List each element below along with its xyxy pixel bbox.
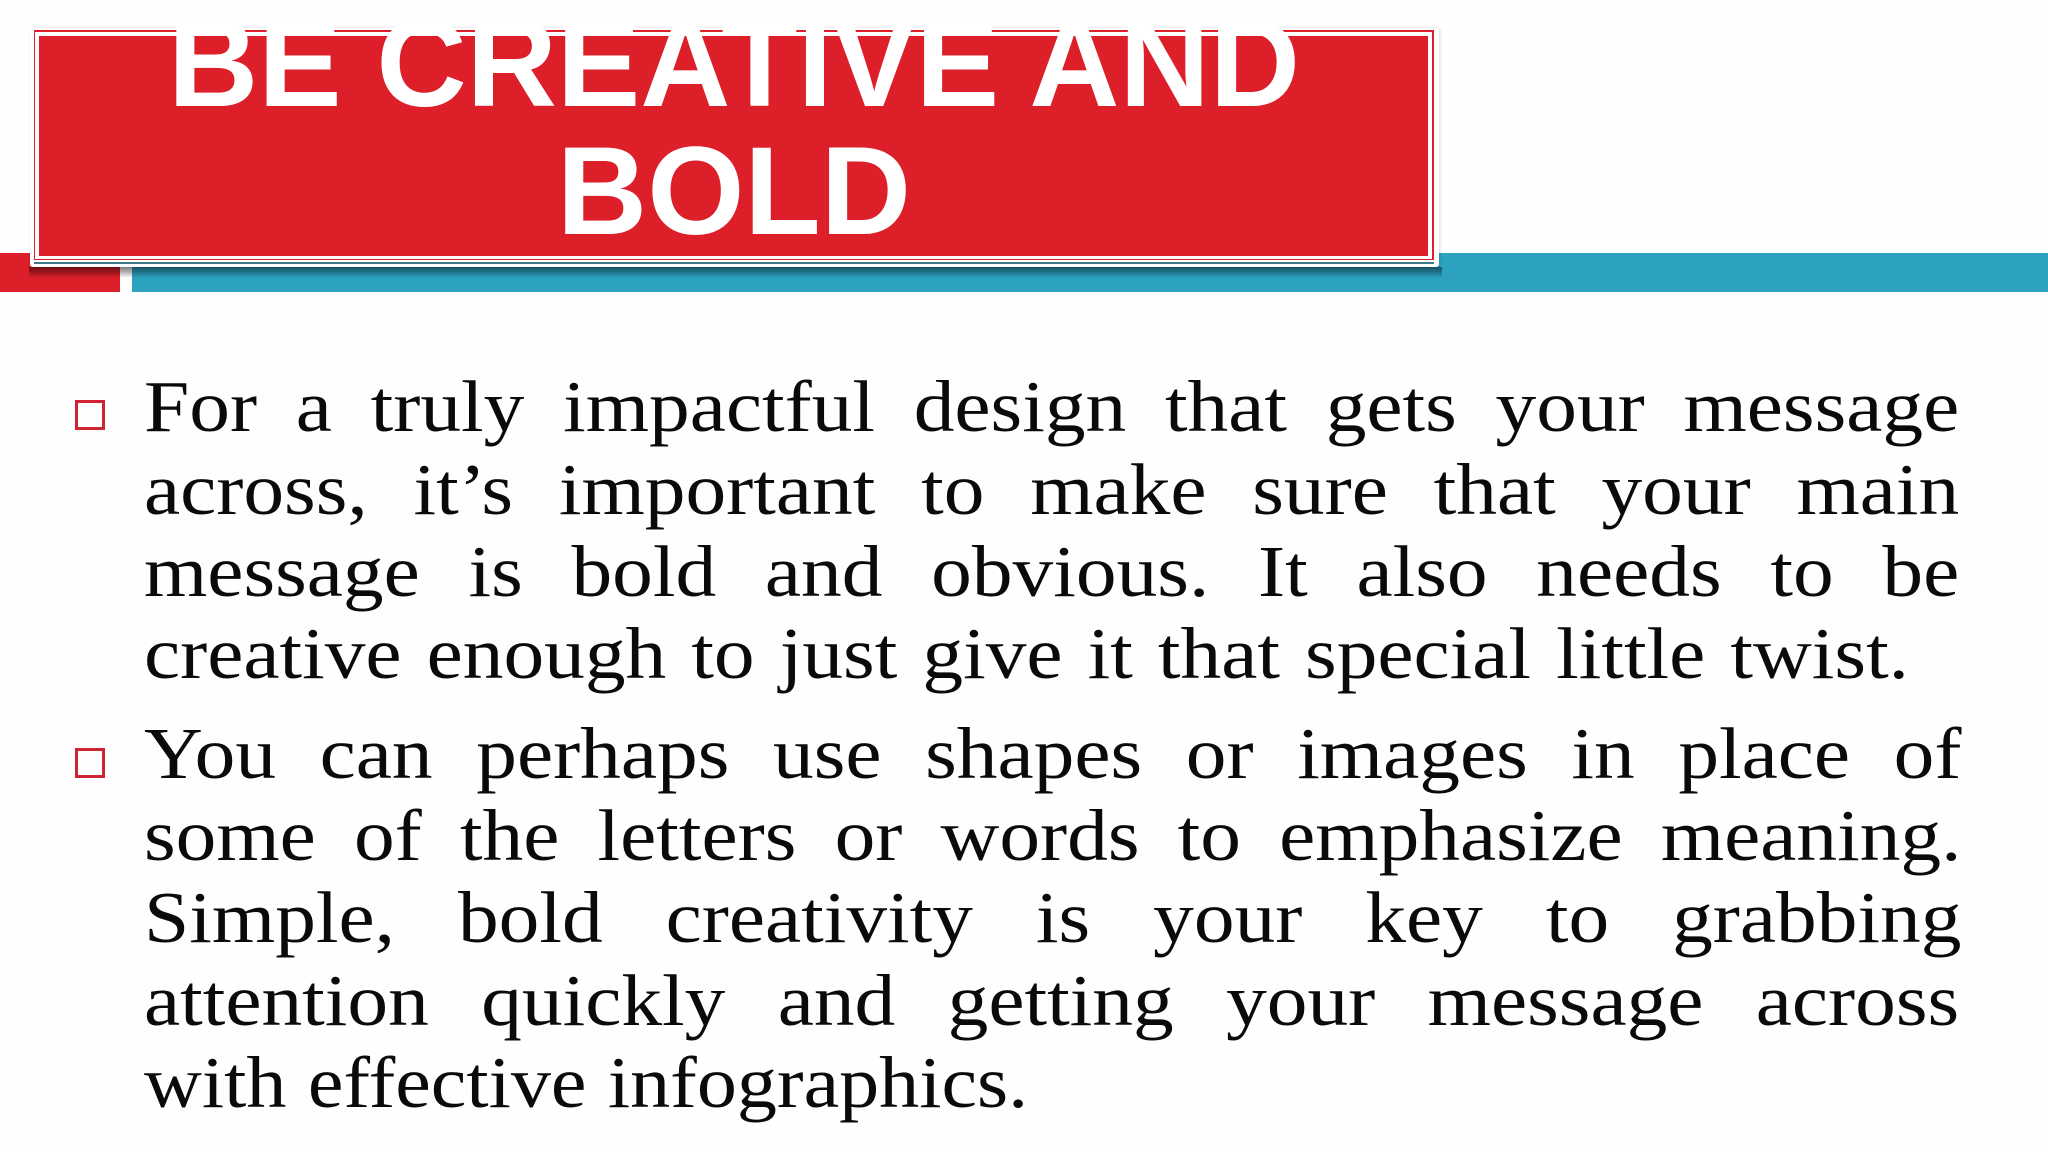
paragraph 1: For a truly impactful design that gets your message	[144, 366, 1959, 447]
header bar: red segment	[0, 253, 120, 292]
title line 2: BOLD	[557, 122, 911, 261]
panel under-strip	[34, 262, 1434, 264]
paragraph 2: You can perhaps use shapes or images in place of	[144, 713, 1961, 794]
paragraph 1: creative enough to just give it that special little twist.	[144, 613, 1909, 694]
panel shadow	[29, 267, 1442, 278]
paragraph 2: Simple, bold creativity is your key to grabbing	[144, 877, 1961, 958]
paragraph 1: across, it’s important to make sure that your main	[144, 449, 1959, 530]
panel red outer line	[34, 30, 1434, 260]
paragraph 1: message is bold and obvious. It also needs to be	[144, 531, 1959, 612]
paragraph 2: some of the letters or words to emphasize meaning.	[144, 795, 1961, 876]
bullet marker 1	[75, 400, 105, 430]
panel white keyline	[35, 32, 1432, 259]
panel red fill	[39, 36, 1428, 256]
bullet marker 2	[75, 748, 105, 778]
title panel	[29, 0, 1442, 278]
header bar: teal segment	[132, 253, 2048, 292]
paragraph 2: with effective infographics.	[144, 1042, 1028, 1123]
paragraph 2: attention quickly and getting your message across	[144, 960, 1959, 1041]
panel frame	[30, 28, 1439, 267]
